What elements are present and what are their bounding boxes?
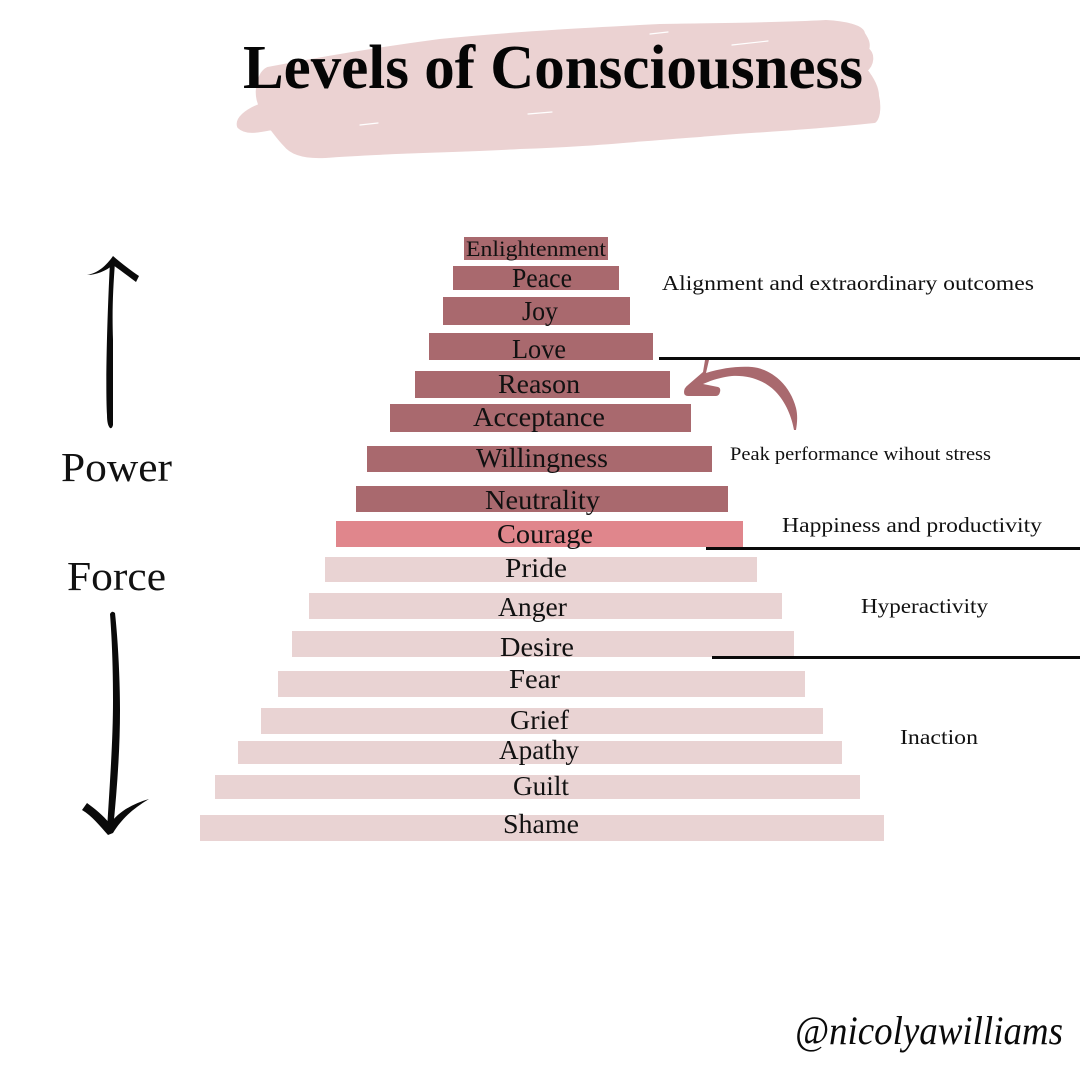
level: Neutrality: Neutrality bbox=[485, 485, 601, 515]
level: Peace bbox=[453, 263, 619, 293]
power label: Power bbox=[61, 444, 172, 490]
level: Love: Love bbox=[512, 334, 566, 364]
brush stroke behind title bbox=[240, 23, 877, 155]
pyramid of consciousness levels bbox=[200, 236, 884, 841]
level: Pride: Pride bbox=[505, 553, 567, 583]
level: Neutrality bbox=[356, 485, 728, 515]
level: Guilt: Guilt bbox=[513, 771, 569, 801]
level: Acceptance bbox=[390, 402, 691, 432]
divider line 2 bbox=[706, 547, 1080, 550]
annotation: peak performance: Peak performance wihout stress bbox=[730, 445, 991, 465]
level: Peace: Peace bbox=[512, 263, 572, 293]
level: Courage bbox=[336, 519, 743, 549]
annotation: hyperactivity: Hyperactivity bbox=[861, 594, 989, 618]
level: Willingness bbox=[367, 443, 712, 473]
divider line 3 bbox=[712, 656, 1080, 659]
level: Desire: Desire bbox=[500, 632, 574, 662]
level: Guilt bbox=[215, 771, 860, 801]
level: Reason bbox=[415, 369, 670, 399]
level: Grief bbox=[261, 705, 823, 735]
level: Reason: Reason bbox=[498, 369, 581, 399]
level: Shame: Shame bbox=[503, 809, 579, 839]
icon: curved arrow to reason bbox=[684, 360, 797, 430]
level: Anger bbox=[309, 592, 782, 622]
title: Levels of Consciousness bbox=[243, 34, 863, 102]
annotation: happiness: Happiness and productivity bbox=[782, 513, 1043, 537]
level: Pride bbox=[325, 553, 757, 583]
level: Joy: Joy bbox=[522, 296, 558, 326]
annotation: alignment: Alignment and extraordinary outcomes bbox=[662, 271, 1034, 295]
icon: force arrow down bbox=[82, 612, 149, 835]
divider line 1 bbox=[659, 357, 1080, 360]
level: Willingness: Willingness bbox=[476, 443, 608, 473]
level: Acceptance: Acceptance bbox=[473, 402, 605, 432]
icon: power arrow up bbox=[87, 256, 139, 428]
level: Desire bbox=[292, 631, 794, 662]
level: Anger: Anger bbox=[498, 592, 567, 622]
level: Apathy: Apathy bbox=[499, 735, 580, 765]
level: Shame bbox=[200, 809, 884, 841]
level: Grief: Grief bbox=[510, 705, 569, 735]
level: Fear bbox=[278, 664, 805, 697]
level: Courage: Courage bbox=[497, 519, 593, 549]
annotation: inaction: Inaction bbox=[900, 725, 979, 749]
force label: Force bbox=[67, 553, 166, 599]
level: Apathy bbox=[238, 735, 842, 765]
handle signature: @nicolyawilliams bbox=[795, 1008, 1063, 1053]
level: Fear: Fear bbox=[509, 664, 560, 694]
level: Love bbox=[429, 333, 653, 364]
level: Enlightenment: Enlightenment bbox=[466, 236, 606, 261]
level: Joy bbox=[443, 296, 630, 326]
